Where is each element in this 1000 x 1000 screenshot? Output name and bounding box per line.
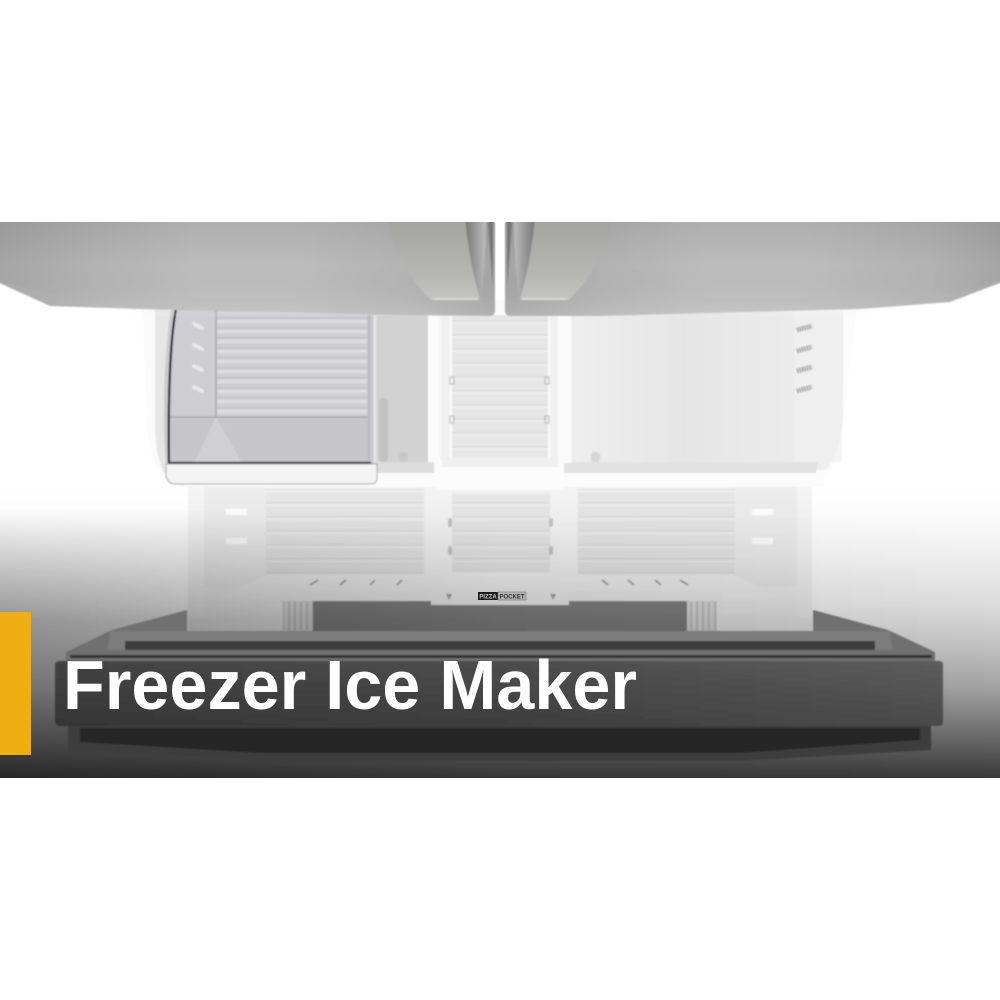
lower floor xyxy=(215,575,424,600)
lower basket xyxy=(188,487,812,637)
fade overlay xyxy=(0,490,1000,778)
accent bar xyxy=(0,612,31,755)
lower rib wall left xyxy=(266,489,424,574)
infographic scene xyxy=(0,222,1000,778)
door handle right xyxy=(506,222,586,300)
bin vents xyxy=(194,324,202,391)
lower centre ribs xyxy=(452,494,550,572)
centre clips xyxy=(450,377,549,423)
freezer door top xyxy=(0,217,1000,316)
bin lip xyxy=(166,464,377,484)
pizza pocket label xyxy=(478,592,526,600)
floor clips xyxy=(310,580,688,585)
upper freezer bin surround xyxy=(154,309,170,474)
door handle left xyxy=(418,222,494,300)
lower rib wall right xyxy=(577,489,735,574)
pizza pocket label: PIZZA xyxy=(479,594,497,600)
right wall vents xyxy=(797,326,812,391)
clear ice bin xyxy=(164,308,377,484)
lower vents xyxy=(226,509,773,544)
bin dark outline xyxy=(169,309,371,463)
clips centre xyxy=(448,518,553,555)
right upper compartment xyxy=(564,310,843,487)
centre upper compartment xyxy=(429,310,571,490)
shelf lip and dark gap xyxy=(282,600,717,632)
left compartment behind ice bin xyxy=(376,314,434,474)
black freezer drawer xyxy=(55,610,943,761)
freezer interior xyxy=(142,300,858,637)
pizza pocket label: POCKET xyxy=(499,594,525,600)
pizza pocket front xyxy=(430,594,570,606)
title: Freezer Ice Maker xyxy=(63,646,637,724)
